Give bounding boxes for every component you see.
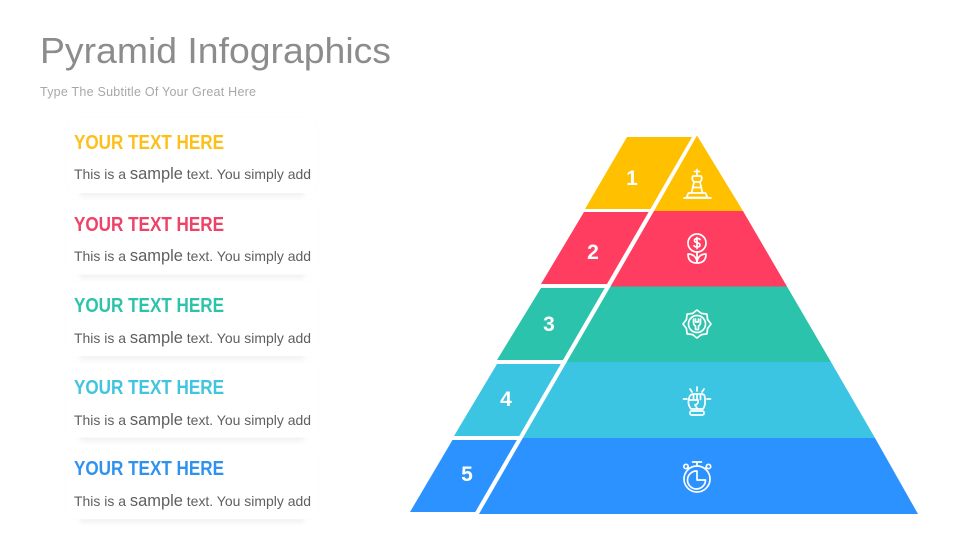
tier 5 right (479, 438, 918, 514)
number 2: 2 (587, 241, 599, 264)
number 4: 4 (500, 388, 512, 411)
card 4 (68, 364, 316, 442)
card 4: YOUR TEXT HERE (74, 377, 224, 399)
number 3: 3 (543, 313, 555, 336)
icon: chess king (684, 170, 711, 198)
card 3 (68, 282, 316, 360)
tier 3 right (567, 286, 831, 362)
icon: raised fist (684, 387, 710, 415)
subtitle: Type The Subtitle Of Your Great Here (40, 85, 256, 99)
card 5: YOUR TEXT HERE (74, 458, 224, 480)
title: Pyramid Infographics (40, 30, 391, 71)
card 2: YOUR TEXT HERE (74, 214, 224, 236)
tier 3 left (497, 288, 605, 360)
card 5 (68, 445, 316, 523)
number 1: 1 (626, 167, 638, 190)
icon: gear wrench (683, 310, 711, 338)
tier 2 right (610, 211, 787, 286)
pyramid (410, 136, 918, 514)
tier 1 left (585, 137, 692, 209)
tier 4 left (454, 364, 561, 436)
card 1: YOUR TEXT HERE (74, 132, 224, 154)
tier 2 left (541, 212, 649, 284)
card 1: This is a sample text. You simply add (74, 165, 311, 183)
card 2: This is a sample text. You simply add (74, 247, 311, 265)
number 5: 5 (461, 463, 473, 486)
tier 1 right (654, 136, 743, 211)
card 1 (68, 119, 316, 197)
card 4: This is a sample text. You simply add (74, 411, 311, 429)
card 3: YOUR TEXT HERE (74, 295, 224, 317)
card 3: This is a sample text. You simply add (74, 329, 311, 347)
icon: money flower (688, 234, 706, 263)
icon: stopwatch (684, 462, 711, 492)
tier 5 left (410, 440, 517, 512)
panel: text list (68, 119, 316, 523)
card 2 (68, 200, 316, 278)
tier 4 right (523, 362, 875, 438)
card 5: This is a sample text. You simply add (74, 492, 311, 510)
